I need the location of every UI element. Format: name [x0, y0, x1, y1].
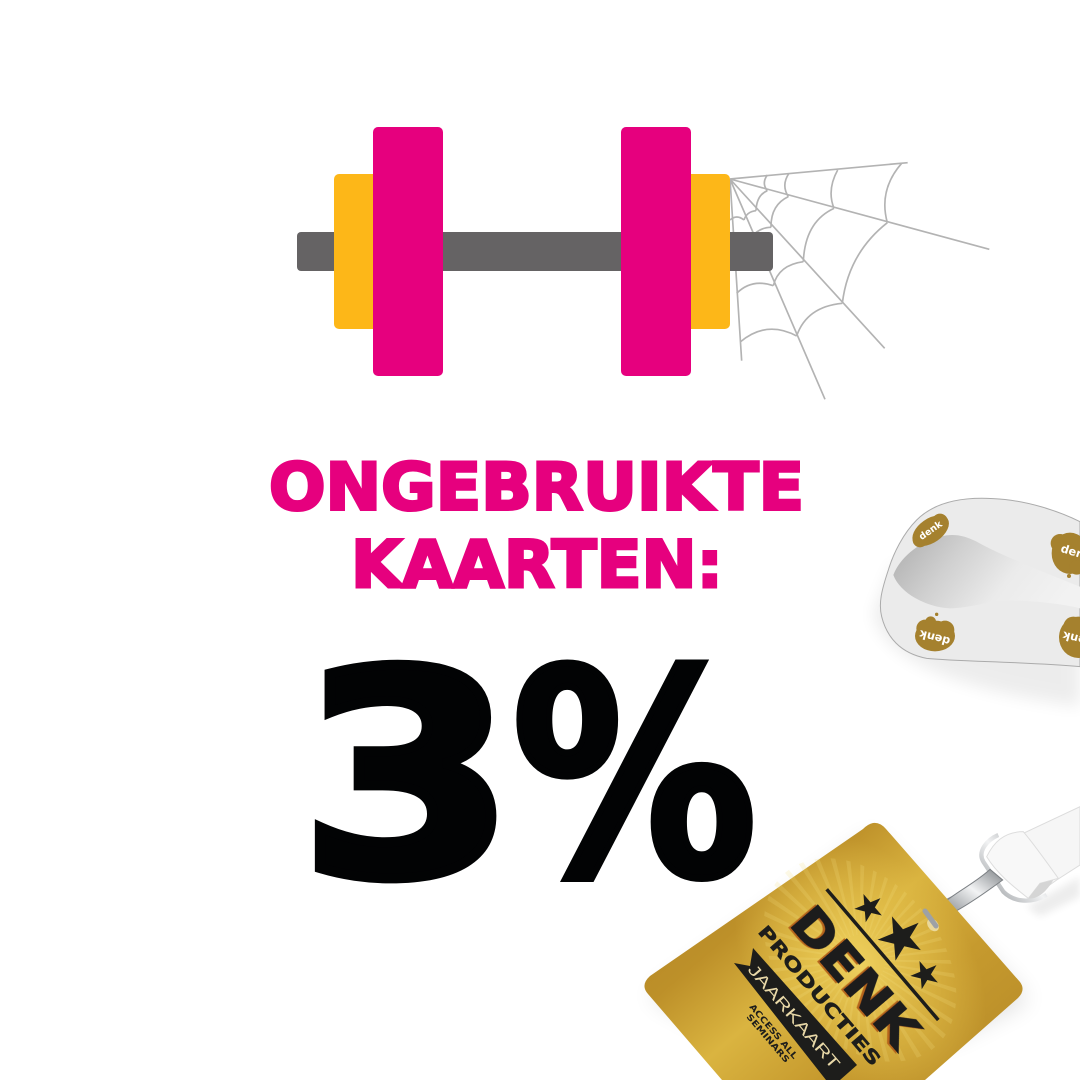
strap tube opening	[1028, 880, 1053, 899]
right yellow plate	[680, 174, 730, 329]
logo: denk bottom left	[915, 613, 955, 651]
right pink plate	[621, 127, 691, 376]
logo: denk top left: denk	[917, 518, 945, 543]
strap shadow	[1027, 877, 1080, 917]
badge shadow	[650, 835, 1028, 1040]
lanyard shadow	[873, 563, 1080, 707]
badge rays	[790, 890, 930, 1030]
big percentage	[300, 610, 758, 942]
logo: denk top left	[907, 509, 954, 552]
star right: ★	[898, 948, 953, 1001]
strap fold	[987, 832, 1058, 898]
logo: denk bottom right	[1059, 617, 1080, 658]
JAARKAART label: JAARKAART	[744, 962, 843, 1073]
left yellow plate	[334, 174, 384, 329]
big percentage: 3	[300, 612, 516, 941]
lanyard band	[880, 498, 1080, 667]
lanyard inner loop	[893, 535, 1080, 608]
metal hook	[930, 888, 973, 928]
strap	[1007, 807, 1080, 897]
seminars text: SEMINARS	[744, 1012, 791, 1065]
divider line	[827, 889, 938, 1020]
metal clasp	[945, 869, 1003, 911]
punch hole	[925, 916, 941, 934]
badge	[644, 823, 1023, 1080]
spider web	[730, 163, 989, 399]
star left: ★	[842, 881, 897, 934]
hook end	[925, 911, 936, 926]
JAARKAART banner	[734, 948, 857, 1080]
clip ring	[981, 835, 1047, 901]
badge plate	[644, 823, 1023, 1080]
heading	[269, 450, 804, 603]
dumbbell bar	[297, 232, 773, 271]
lanyard strap with clip	[930, 807, 1080, 928]
metal hook highlight	[930, 888, 973, 928]
star centre: ★	[859, 895, 945, 979]
lanyard	[873, 498, 1080, 707]
PRODUCTIES wordmark: PRODUCTIES	[753, 922, 885, 1071]
access text: ACCESS ALL	[747, 1002, 800, 1062]
logo: denk bottom left: denk	[917, 627, 952, 649]
heading: ONGEBRUIKTE	[269, 450, 804, 526]
badge glow	[644, 823, 1023, 1080]
heading: KAARTEN:	[351, 528, 723, 603]
DENK wordmark: DENK	[779, 895, 932, 1061]
big percentage: %	[512, 610, 758, 942]
icon: dumbbell	[297, 127, 773, 376]
logo: denk top right	[1051, 533, 1080, 578]
left pink plate	[373, 127, 443, 376]
